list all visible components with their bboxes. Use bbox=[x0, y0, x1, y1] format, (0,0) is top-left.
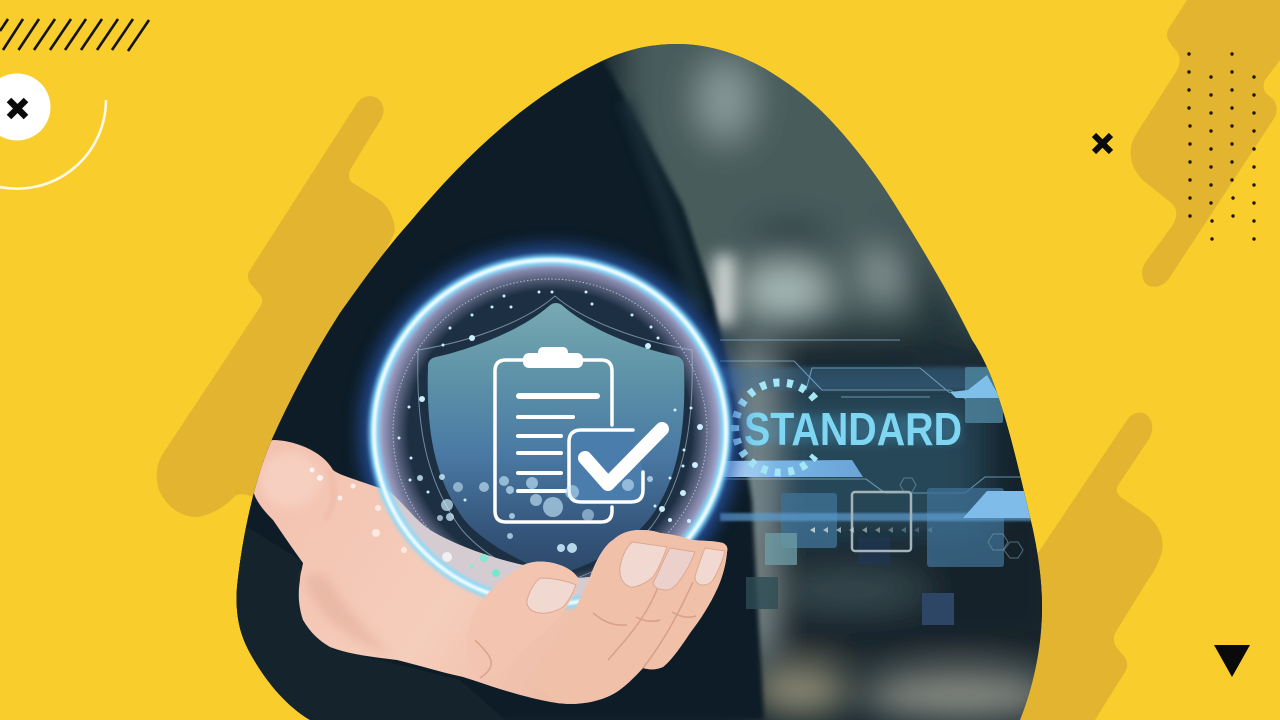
hatch lines bbox=[0, 19, 149, 51]
palm particles bbox=[310, 468, 500, 577]
label glow bbox=[745, 415, 960, 443]
finger two to four bbox=[538, 530, 727, 704]
decorative shape: left ochre streak bbox=[157, 96, 395, 517]
label: STANDARD: STANDARD bbox=[744, 403, 962, 455]
orb dotted ring bbox=[392, 278, 708, 534]
orb ring bbox=[374, 260, 726, 604]
jacket fold bbox=[625, 100, 700, 310]
check box icon bbox=[569, 429, 662, 502]
orb particles bbox=[398, 290, 703, 553]
decorative shape: bottom right ochre streak bbox=[1010, 413, 1163, 720]
icon: black triangle bbox=[1214, 645, 1250, 677]
arrow row bbox=[810, 527, 932, 533]
shield outer line bbox=[418, 296, 692, 584]
orb ring glow bbox=[374, 260, 726, 604]
nail four bbox=[695, 548, 725, 585]
glow behind orb bbox=[348, 234, 752, 542]
nail one bbox=[527, 578, 576, 613]
icon: white circle with cross bbox=[0, 74, 50, 140]
icon: black cross bbox=[1094, 135, 1111, 152]
finger one bbox=[482, 562, 578, 612]
hand: palm and wrist bbox=[252, 440, 727, 704]
palm seen through orb bbox=[390, 492, 680, 599]
blurred backdrop bbox=[220, 10, 1060, 720]
progress dial bbox=[735, 382, 815, 472]
finger creases bbox=[475, 582, 696, 678]
fingers bbox=[467, 530, 727, 704]
clipboard icon bbox=[495, 347, 612, 522]
nail three bbox=[653, 548, 695, 590]
shield bbox=[428, 303, 684, 575]
dot grid bbox=[1187, 52, 1256, 241]
decorative shape: top right ochre streak bbox=[1131, 0, 1280, 287]
photo: blob-clipped scene bbox=[220, 10, 1060, 720]
white ring arc bbox=[0, 100, 106, 189]
nail two bbox=[620, 542, 667, 587]
hexagons bbox=[900, 478, 1023, 558]
dark jacket bbox=[220, 40, 764, 720]
sleeve bbox=[236, 528, 310, 720]
digital chart lines and squares bbox=[720, 340, 1040, 625]
orb bbox=[376, 262, 724, 578]
